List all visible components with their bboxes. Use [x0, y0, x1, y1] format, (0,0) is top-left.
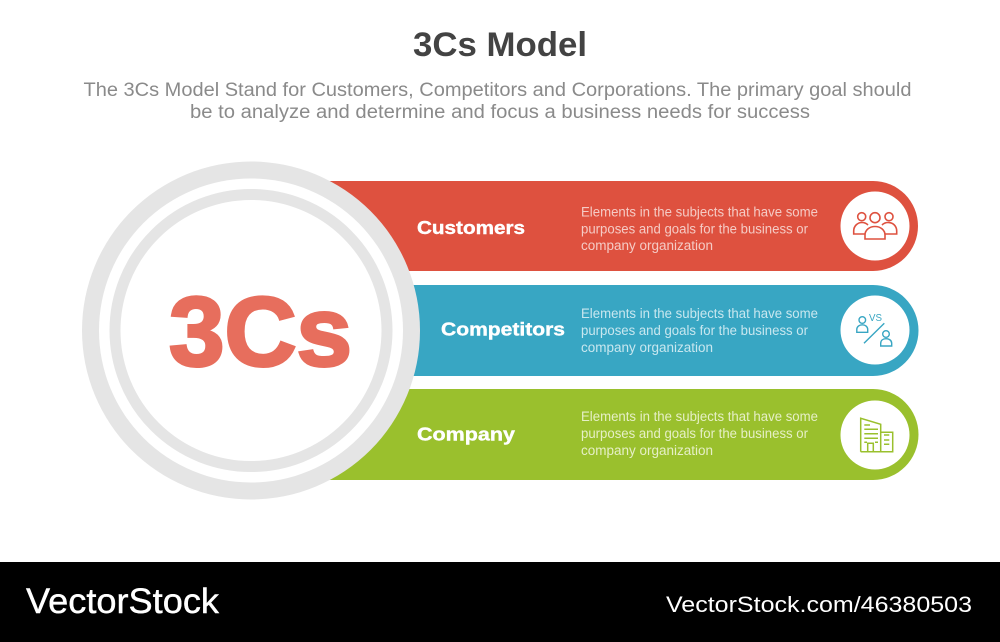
competitors description: company organization [581, 340, 713, 355]
customers description: Elements in the subjects that have some [581, 204, 818, 220]
competitors description: purposes and goals for the business or [581, 323, 808, 338]
title: 3Cs Model [413, 26, 587, 64]
customers description [581, 204, 818, 253]
icon: competitors versus: VS [869, 312, 882, 324]
footer bar [0, 562, 1000, 642]
icon: competitors versus [840, 296, 910, 364]
panel: company bar [251, 389, 918, 480]
company description [581, 409, 818, 458]
customers label: Customers [417, 217, 525, 238]
subtitle text: be to analyze and determine and focus a business needs for success [190, 102, 810, 123]
company description: Elements in the subjects that have some [581, 409, 818, 424]
subtitle text [84, 80, 912, 123]
central circle [82, 162, 420, 500]
competitors description [581, 306, 818, 355]
icon: customers group [840, 192, 910, 260]
company label: Company [417, 424, 516, 444]
footer logo: VectorStock [26, 582, 220, 621]
competitors label: Competitors [441, 318, 565, 340]
panel: customers bar [251, 181, 918, 271]
3Cs heading: 3Cs [169, 276, 352, 386]
footer url: VectorStock.com/46380503 [666, 592, 972, 617]
subtitle text: The 3Cs Model Stand for Customers, Competitors and Corporations. The primary goal should [84, 80, 912, 101]
customers description: purposes and goals for the business or [581, 222, 808, 236]
customers description: company organization [581, 238, 713, 253]
panel: competitors bar [251, 285, 918, 376]
competitors description: Elements in the subjects that have some [581, 306, 818, 321]
company description: purposes and goals for the business or [581, 426, 808, 441]
icon: company building [840, 400, 910, 470]
company description: company organization [581, 443, 713, 458]
